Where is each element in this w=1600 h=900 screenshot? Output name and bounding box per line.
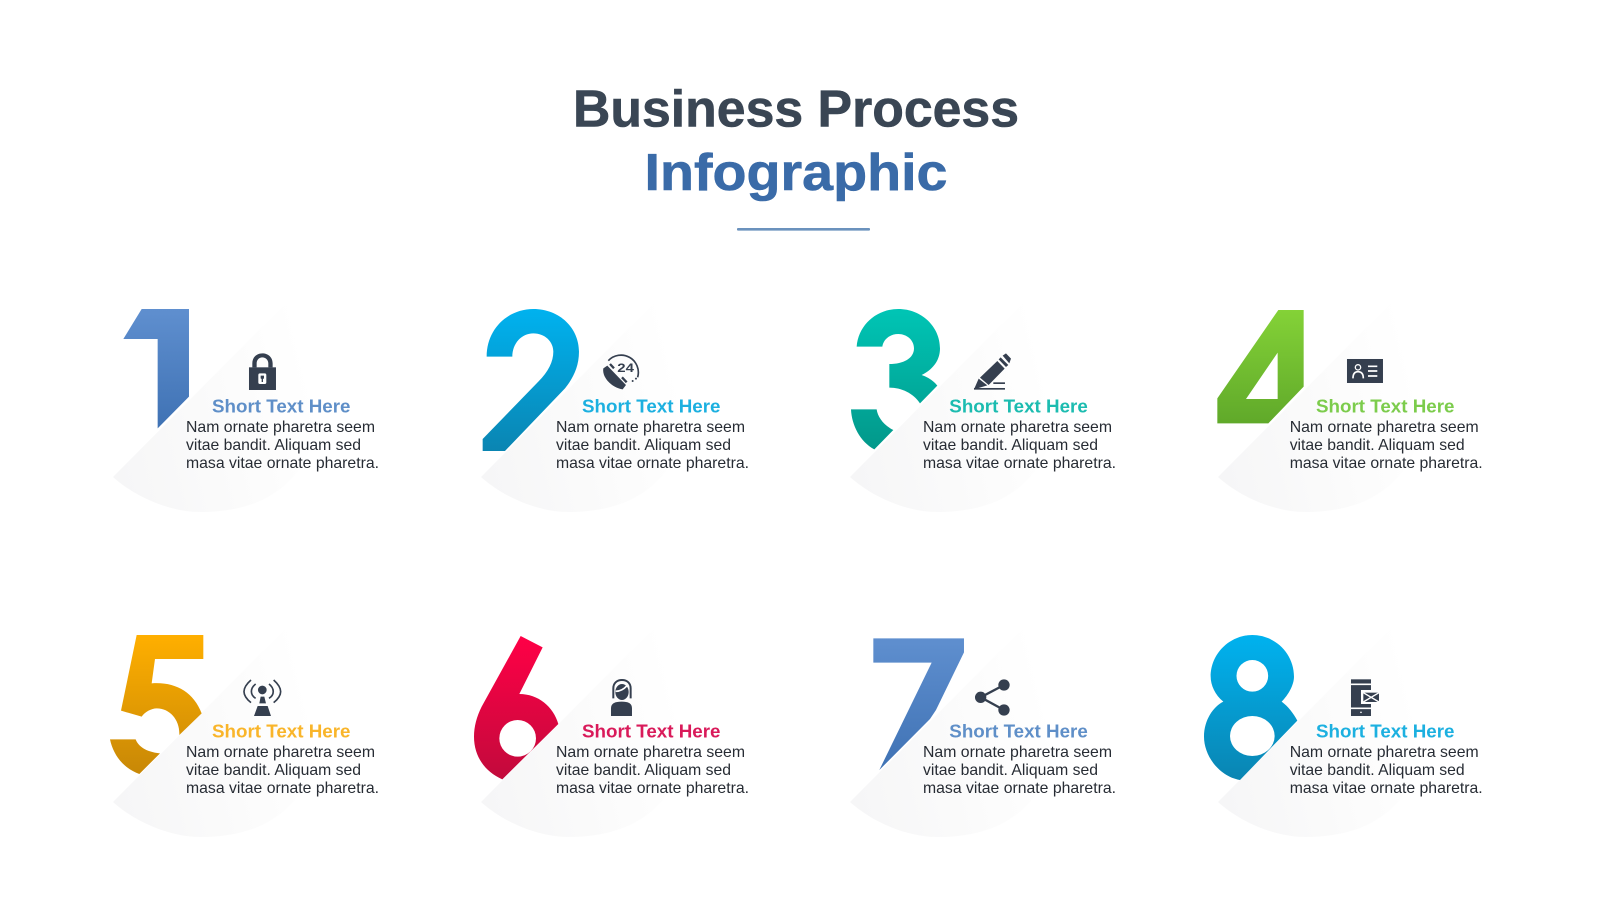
- icon: 24 hour phone: 24: [617, 361, 634, 375]
- body text: vitae bandit. Aliquam sed: [556, 437, 731, 454]
- numeral 8: [1204, 635, 1297, 780]
- panel: step 6: [474, 624, 749, 837]
- body text: vitae bandit. Aliquam sed: [1290, 762, 1465, 779]
- body text: [1290, 419, 1483, 472]
- panel: step 8: [1204, 624, 1483, 837]
- body text: [556, 744, 749, 797]
- body text: masa vitae ornate pharetra.: [186, 780, 379, 797]
- body text: [556, 419, 749, 472]
- icon: pencil: [974, 353, 1011, 390]
- numeral 3: [851, 309, 940, 449]
- title: Infographic: [644, 144, 948, 202]
- body text: Nam ornate pharetra seem: [186, 744, 375, 761]
- icon: padlock: [249, 353, 276, 390]
- body text: Nam ornate pharetra seem: [186, 419, 375, 436]
- numeral 2: [483, 309, 579, 451]
- numeral 1: [123, 309, 189, 428]
- panel: step 3: [850, 299, 1116, 512]
- body text: masa vitae ornate pharetra.: [556, 780, 749, 797]
- body text: [186, 419, 379, 472]
- title: [573, 80, 1019, 202]
- numeral 6: [474, 636, 558, 779]
- body text: [186, 744, 379, 797]
- numeral 5: [110, 635, 203, 774]
- body text: masa vitae ornate pharetra.: [186, 455, 379, 472]
- body text: masa vitae ornate pharetra.: [1290, 780, 1483, 797]
- body text: masa vitae ornate pharetra.: [923, 455, 1116, 472]
- panel: step 7: [850, 624, 1116, 837]
- heading: Short Text Here: [1316, 721, 1454, 742]
- title: Business Process: [573, 80, 1019, 138]
- numeral 4: [1217, 310, 1304, 423]
- heading: Short Text Here: [949, 396, 1088, 417]
- body text: masa vitae ornate pharetra.: [923, 780, 1116, 797]
- heading: Short Text Here: [212, 396, 350, 417]
- body text: Nam ornate pharetra seem: [1290, 744, 1479, 761]
- panel: step 5: [110, 624, 379, 837]
- body text: [923, 744, 1116, 797]
- body text: Nam ornate pharetra seem: [923, 744, 1112, 761]
- body text: masa vitae ornate pharetra.: [556, 455, 749, 472]
- body text: Nam ornate pharetra seem: [556, 744, 745, 761]
- body text: Nam ornate pharetra seem: [1290, 419, 1479, 436]
- panel: step 2: [481, 299, 749, 512]
- panel: step 1: [113, 299, 379, 512]
- heading: Short Text Here: [582, 396, 720, 417]
- body text: Nam ornate pharetra seem: [923, 419, 1112, 436]
- body text: vitae bandit. Aliquam sed: [556, 762, 731, 779]
- body text: vitae bandit. Aliquam sed: [923, 762, 1098, 779]
- heading: Short Text Here: [949, 721, 1088, 742]
- numeral 7: [873, 638, 964, 770]
- body text: [923, 419, 1116, 472]
- heading: Short Text Here: [1316, 396, 1454, 417]
- icon: share: [975, 679, 1010, 716]
- body text: vitae bandit. Aliquam sed: [186, 762, 361, 779]
- body text: vitae bandit. Aliquam sed: [1290, 437, 1465, 454]
- icon: 24 hour phone: [603, 355, 638, 389]
- body text: [1290, 744, 1483, 797]
- icon: phone with envelope: [1351, 679, 1380, 716]
- icon: radio tower: [244, 680, 281, 716]
- heading: Short Text Here: [212, 721, 350, 742]
- heading: Short Text Here: [582, 721, 720, 742]
- body text: vitae bandit. Aliquam sed: [186, 437, 361, 454]
- body text: vitae bandit. Aliquam sed: [923, 437, 1098, 454]
- body text: masa vitae ornate pharetra.: [1290, 455, 1483, 472]
- icon: headset woman: [611, 680, 632, 716]
- title underline: [737, 228, 870, 231]
- panel: step 4: [1217, 299, 1483, 512]
- body text: Nam ornate pharetra seem: [556, 419, 745, 436]
- icon: id card: [1347, 359, 1383, 383]
